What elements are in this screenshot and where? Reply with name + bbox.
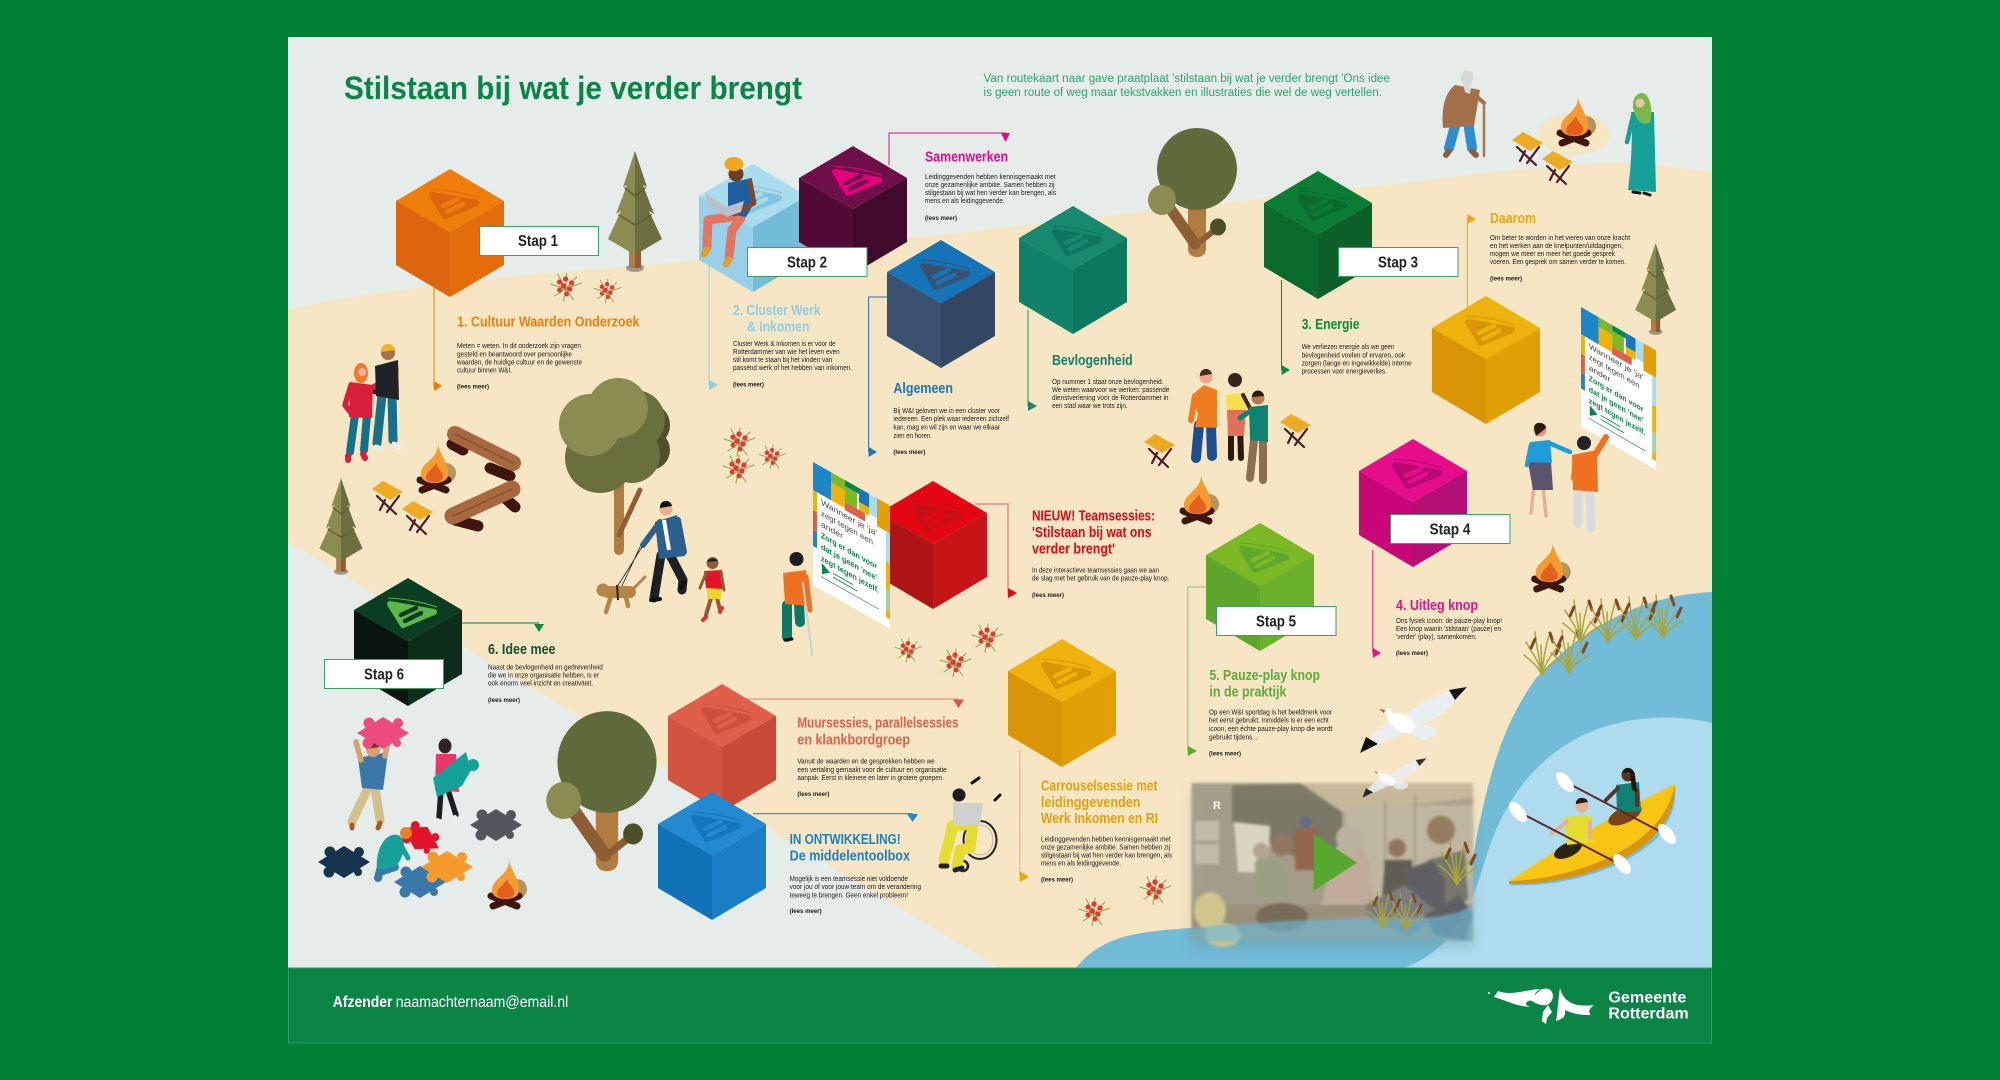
heading: Werk Inkomen en RI — [1041, 811, 1158, 827]
body: Naast de bevlogenheid en gedrevenheid — [488, 664, 603, 671]
heading: en klankbordgroep — [797, 732, 910, 748]
people: kneeling man — [377, 827, 412, 878]
fire: middle — [1183, 475, 1219, 521]
people: puzzle man — [352, 742, 388, 828]
chairs: camp left — [372, 481, 433, 534]
heading: 6. Idee mee — [488, 642, 556, 658]
section: De middelentoolbox — [658, 792, 921, 920]
body: Bij W&I geloven we in een cluster voor — [893, 408, 1001, 415]
sky background — [288, 37, 1712, 968]
body: stil komt te staan bij het vinden van — [733, 357, 832, 364]
people: woman and man at poster — [1527, 423, 1606, 528]
body: (lees meer) — [1209, 751, 1241, 758]
body: gebruikt tijdens... — [1209, 734, 1258, 741]
body: Op nummer 1 staat onze bevlogenheid. — [1052, 379, 1164, 386]
arrow — [1188, 587, 1206, 756]
cube — [658, 792, 766, 920]
section: Carrouselsessie — [1008, 639, 1173, 884]
people: puzzle woman — [433, 738, 479, 822]
section: Algemeen — [869, 240, 1009, 457]
heading: Samenwerken — [925, 150, 1008, 166]
body: (lees meer) — [1032, 592, 1064, 599]
tree: pine right — [1635, 243, 1676, 335]
heading: Bevlogenheid — [1052, 353, 1133, 369]
heading — [790, 832, 910, 864]
panel: landscape map — [288, 37, 1712, 968]
heading: IN ONTWIKKELING! — [790, 832, 901, 848]
body: (lees meer) — [1396, 650, 1428, 657]
body — [797, 759, 947, 798]
cube — [1008, 639, 1116, 767]
photo image — [1192, 783, 1473, 947]
heading: in de praktijk — [1209, 685, 1287, 701]
cube — [1359, 439, 1467, 567]
poster: left: ander — [821, 519, 843, 541]
water light — [1404, 718, 1712, 968]
body: Om beter te worden in het vieren van onze kracht — [1490, 235, 1630, 242]
arrow — [1020, 750, 1029, 882]
sender — [333, 994, 568, 1011]
body: mens en als leidinggevende. — [925, 198, 1005, 205]
body: We verliezen energie als we geen — [1302, 344, 1395, 351]
label: Stap 5: Stap 5 — [1256, 614, 1296, 630]
cube — [1432, 296, 1540, 424]
section: 3. Energie — [1264, 171, 1412, 376]
heading: NIEUW! Teamsessies: — [1032, 509, 1155, 525]
flowers — [551, 273, 1171, 926]
label: Stap 1 — [480, 226, 598, 256]
tree: round top — [1148, 128, 1237, 257]
fire: right — [1535, 543, 1571, 589]
body: (lees meer) — [457, 384, 489, 391]
arrow — [869, 297, 888, 457]
body: zien en horen. — [893, 433, 932, 440]
people: group of three — [1191, 369, 1268, 480]
body: Vanuit de waarden en de gesprekken hebben we — [797, 759, 935, 766]
arrow — [1467, 214, 1476, 310]
label: Stap 3 — [1338, 248, 1458, 276]
heading — [1032, 509, 1155, 557]
body: stilgestaan bij wat hen verder kan brengen, als — [925, 190, 1057, 197]
body — [1302, 344, 1412, 376]
heading: & Inkomen — [747, 319, 809, 335]
heading: Carrouselsessie met — [1041, 779, 1158, 795]
tree: pine top — [608, 151, 662, 272]
cube — [699, 164, 807, 292]
body: cultuur binnen W&I. — [457, 368, 512, 375]
footer bar — [288, 968, 1712, 1043]
heading: verder brengt' — [1032, 541, 1115, 557]
body — [790, 876, 921, 915]
photo logo: R — [1213, 800, 1221, 812]
tree: leafy centre — [559, 378, 670, 555]
body: Rotterdammer van wie het leven even — [733, 349, 840, 356]
body: waarden, de huidige cultuur en de gewenste — [456, 360, 582, 366]
puzzle: blue — [394, 866, 446, 898]
body: de slag met het gebruik van de pauze-play knop. — [1032, 576, 1169, 583]
heading — [1041, 779, 1158, 827]
body: Mogelijk is een teamsessie niet voldoende — [790, 876, 908, 883]
body: Op een W&I sportdag is het beeldmerk voor — [1209, 710, 1333, 717]
body: kan, mag en wil zijn en waar we elkaar — [893, 424, 1001, 432]
play button — [1314, 834, 1357, 891]
heading: 2. Cluster Werk — [733, 303, 821, 319]
body: (lees meer) — [488, 697, 520, 704]
people: couple — [345, 344, 399, 460]
logo: Rotterdam: Gemeente — [1608, 989, 1687, 1006]
body: (lees meer) — [1041, 877, 1073, 884]
body: Leidinggevenden hebben kennisgemaakt met — [1041, 836, 1171, 843]
tree: pine left — [319, 478, 363, 575]
body: Meten = weten. In dit onderzoek zijn vragen — [457, 343, 581, 350]
section: Bevlogenheid — [1019, 206, 1170, 411]
body — [733, 341, 852, 389]
heading: 5. Pauze-play knop — [1209, 668, 1320, 684]
section: Samenwerken — [799, 133, 1057, 274]
reeds over photo — [1368, 842, 1477, 930]
people: child — [700, 557, 724, 620]
body: Ons fysiek icoon: de pauze-play knop! — [1396, 618, 1502, 625]
arrow — [753, 814, 918, 822]
heading: 1. Cultuur Waarden Onderzoek — [457, 315, 640, 331]
body: (lees meer) — [797, 791, 829, 798]
intro text: Van routekaart naar gave praatplaat 'stilstaan bij wat je verder brengt 'Ons idee — [984, 73, 1390, 85]
section: 5. Pauze-play knop — [1188, 523, 1333, 758]
logo: Rotterdam — [1488, 988, 1689, 1024]
body: (lees meer) — [893, 449, 925, 456]
bird: small — [1362, 758, 1427, 798]
body: processen voor energieverlies. — [1302, 369, 1387, 376]
section: Daarom — [1432, 211, 1630, 424]
body: stilgestaan bij wat hen verder kan brengen, als — [1041, 852, 1173, 859]
label: Stap 4: Stap 4 — [1430, 522, 1471, 538]
body — [1396, 618, 1502, 657]
puzzle: orange — [421, 851, 473, 883]
label: Stap 5 — [1216, 606, 1336, 636]
poster: right — [1581, 307, 1656, 470]
body: (lees meer) — [1490, 276, 1522, 283]
hull — [1509, 786, 1675, 885]
body: In deze interactieve teamsessies gaan we aan — [1032, 568, 1159, 575]
heading: 'Stilstaan bij wat ons — [1032, 525, 1152, 541]
body — [488, 664, 603, 704]
chairs: middle — [1144, 414, 1311, 467]
body — [1041, 836, 1173, 884]
body: onze gezamenlijke ambitie. Samen hebben zij — [925, 182, 1055, 189]
label: Stap 6 — [324, 660, 444, 688]
label: Stap 6: Stap 6 — [364, 666, 404, 684]
label: Stap 1: Stap 1 — [518, 233, 558, 250]
sender: Afzender — [333, 994, 392, 1011]
section: 2. Cluster Werk & Inkomen — [699, 164, 852, 390]
body: iedereen. Een plek waar iedereen zichzelf — [893, 416, 1009, 423]
poster: left: dat je geen 'nee' — [821, 542, 877, 583]
poster: right: zegt tegen jezelf. — [1589, 395, 1645, 437]
heading: Daarom — [1490, 211, 1536, 227]
poster: left: Zorg er dan voor — [821, 530, 878, 571]
section: 1. Cultuur Waarden Onderzoek — [396, 169, 640, 391]
photo shadow — [1192, 790, 1473, 948]
heading: 3. Energie — [1302, 317, 1360, 333]
body: 'verder' (play), samenkomen. — [1396, 634, 1477, 641]
fire: camp left — [420, 444, 456, 490]
section: 4. Uitleg knop — [1359, 439, 1502, 658]
photo with play button — [1192, 783, 1477, 948]
cube — [879, 481, 987, 609]
arrow — [434, 285, 442, 391]
body: dienstverlening voor de Rotterdammer in — [1052, 395, 1169, 402]
body: ook enorm veel inzicht en creativiteit. — [488, 681, 593, 688]
heading — [797, 716, 959, 748]
cube — [1206, 523, 1314, 651]
people: man with crutch — [783, 552, 812, 655]
heading: Algemeen — [893, 381, 953, 397]
cube — [354, 578, 462, 706]
heading — [733, 303, 821, 335]
front paddler — [1552, 798, 1593, 845]
arrow — [1373, 550, 1381, 658]
poster: right: Wanneer je 'ja' — [1589, 341, 1644, 382]
body: Leidinggevenden hebben kennisgemaakt met — [925, 174, 1056, 181]
poster: right: Zorg er dan voor — [1589, 373, 1644, 414]
puzzle: grey — [470, 809, 522, 841]
label: Stap 2 — [748, 248, 867, 276]
body — [925, 174, 1057, 222]
campfire: top right — [1512, 97, 1610, 184]
bird: large — [1360, 687, 1467, 753]
body: (lees meer) — [790, 908, 822, 915]
heading: Muursessies, parallelsessies — [797, 716, 959, 732]
body: (lees meer) — [925, 215, 957, 222]
logo: Rotterdam: Rotterdam — [1608, 1005, 1689, 1022]
cube — [1019, 206, 1127, 334]
intro text: is geen route of weg maar tekstvakken en illustraties die wel de weg vertellen. — [984, 87, 1382, 99]
cube — [396, 169, 504, 297]
poster: left: zegt tegen een — [821, 508, 873, 547]
intro text — [984, 73, 1390, 99]
sender: naamachternaam@email.nl — [396, 994, 568, 1011]
label: Stap 2: Stap 2 — [787, 254, 827, 272]
water dark — [1076, 592, 1712, 968]
body — [456, 343, 582, 391]
fire: bottom left — [491, 860, 527, 906]
arrow — [1028, 310, 1037, 411]
body: een vertaling gemaakt voor de cultuur en organisatie — [797, 767, 947, 774]
footer — [288, 968, 1712, 1043]
poster: right: dat je geen 'nee' — [1589, 384, 1643, 425]
body: Cluster Werk & Inkomen is er voor de — [733, 341, 836, 348]
body: mogen we meer en meer het goede gesprek — [1490, 251, 1615, 258]
body: zorgen (lange en ingewikkelde) interne — [1302, 360, 1412, 367]
body: We weten waarvoor we werken: passende — [1052, 387, 1170, 394]
poster: left — [813, 462, 890, 629]
section: 6. Idee mee — [354, 578, 603, 706]
heading: 4. Uitleg knop — [1396, 598, 1478, 614]
people: woman hijab — [1627, 93, 1656, 195]
body — [1052, 379, 1170, 410]
body — [1209, 710, 1333, 758]
body: teweeg te brengen. Geen enkel probleem! — [790, 892, 908, 899]
arrow — [460, 623, 544, 632]
heading: De middelentoolbox — [790, 848, 910, 864]
puzzle: navy — [318, 846, 370, 878]
poster: left: Wanneer je 'ja' — [821, 497, 877, 538]
body: het eerst gebruikt. Inmiddels is er een echt — [1209, 718, 1329, 725]
heading — [1209, 668, 1320, 701]
arrow — [746, 699, 964, 708]
puzzle: red — [397, 817, 445, 859]
title: Stilstaan bij wat je verder brengt — [344, 70, 802, 106]
body: (lees meer) — [733, 382, 764, 389]
poster: right: ander — [1589, 362, 1610, 384]
body: voeren. Een gesprek om samen verder te komen. — [1490, 259, 1626, 266]
people: old man — [1443, 71, 1484, 156]
body — [1032, 568, 1169, 599]
cube — [799, 146, 907, 274]
heading: leidinggevenden — [1041, 795, 1140, 811]
arrow — [889, 133, 1010, 165]
arrow — [975, 504, 1017, 598]
body: Een knop waarin 'stilstaan' (pauze) en — [1396, 626, 1501, 633]
label: Stap 3: Stap 3 — [1378, 254, 1418, 272]
kayak with two paddlers — [1506, 768, 1679, 885]
body: voor jou of voor jouw team om de verandering — [790, 884, 921, 891]
arrow — [709, 262, 718, 390]
body: aanpak. Eerst in kleinere en later in grotere groepen. — [797, 775, 944, 782]
paddles — [1506, 769, 1679, 877]
body: icoon, een échte pauze-play knop die wordt — [1209, 726, 1332, 733]
section: Muursessies — [668, 684, 964, 812]
rear paddler — [1606, 768, 1641, 812]
reeds — [1524, 595, 1683, 675]
poster: right: zegt tegen een — [1589, 352, 1640, 390]
body — [893, 408, 1009, 456]
body: een stad waar we trots zijn. — [1052, 403, 1128, 410]
poster: left: zegt tegen jezelf. — [821, 553, 879, 595]
body — [1490, 235, 1630, 283]
body: bevlogenheid voelen of ervaren, ook — [1302, 352, 1406, 359]
body: gesteld en beantwoord over persoonlijke — [457, 352, 572, 358]
people: wheelchair — [941, 778, 1000, 871]
cube — [1264, 171, 1372, 299]
body: passend werk of het hebben van inkomen. — [733, 365, 852, 372]
logs: benches — [452, 434, 515, 526]
cube — [887, 240, 995, 368]
body: en het werken aan de knelpunten/uitdagingen, — [1490, 243, 1623, 250]
puzzle: pink — [357, 717, 409, 749]
section: NIEUW! Teamsessies — [879, 481, 1169, 609]
body: onze gezamenlijke ambitie. Samen hebben zij — [1041, 845, 1170, 852]
cube — [668, 684, 776, 812]
body: die we in onze organisatie hebben, is er — [488, 672, 600, 679]
people: laptop person on cube — [704, 157, 754, 264]
sand path — [288, 163, 1712, 968]
people: man with dog — [596, 501, 685, 612]
arrow — [1282, 280, 1290, 375]
label: Stap 4 — [1390, 514, 1510, 544]
tree: round bottom — [546, 711, 657, 871]
body: mens en als leidinggevende. — [1041, 860, 1121, 867]
